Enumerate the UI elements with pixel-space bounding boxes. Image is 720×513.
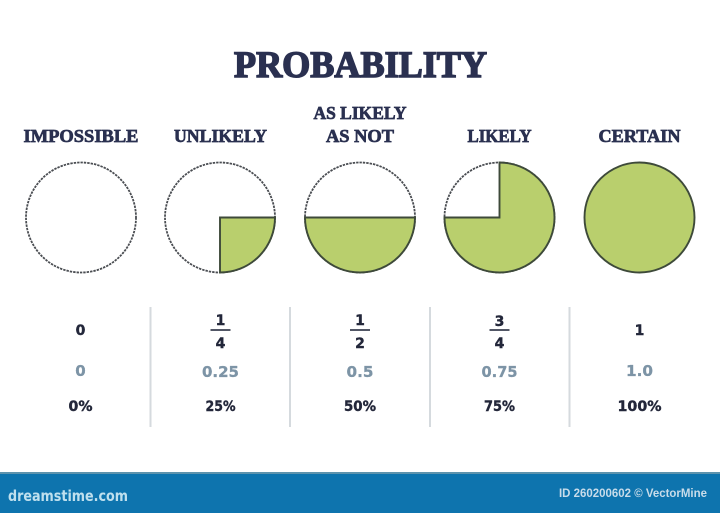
values: certain [618, 323, 662, 415]
values: unlikely: 25% [206, 399, 236, 415]
values: as likely as not: 2 [355, 336, 365, 352]
values: likely: 3 [495, 314, 504, 330]
values: impossible [68, 323, 92, 415]
values: unlikely: 1 [216, 313, 225, 329]
pie: as likely as not, half filled [305, 162, 415, 272]
values: unlikely: 4 [216, 336, 226, 352]
pie: unlikely, one quarter filled [165, 162, 275, 272]
values: as likely as not: 1 [355, 313, 365, 329]
footer band [0, 472, 720, 513]
column dividers [150, 307, 570, 427]
values: certain: 100% [618, 399, 662, 415]
column heading: unlikely: UNLIKELY [174, 126, 267, 146]
values: as likely as not [344, 313, 376, 415]
column heading: impossible: IMPOSSIBLE [24, 126, 138, 146]
values: impossible: 0 [76, 323, 86, 339]
pie: likely, three quarters filled [444, 162, 554, 272]
title: PROBABILITY [234, 45, 487, 86]
values: likely: 4 [495, 336, 505, 352]
values: likely: 0.75 [482, 363, 518, 381]
values: impossible: 0% [68, 399, 92, 415]
image credit: ID 260200602 © VectorMine [559, 488, 707, 500]
values: unlikely [202, 313, 239, 415]
values: as likely as not: 50% [344, 399, 376, 415]
column heading: certain: CERTAIN [598, 126, 680, 146]
values: impossible: 0 [75, 362, 86, 380]
watermark logo text: dreamstime.com [8, 487, 128, 505]
values: unlikely: 0.25 [202, 363, 239, 381]
column heading: as likely as not [314, 103, 406, 146]
column heading: as likely as not: AS NOT [326, 126, 394, 146]
values: likely [482, 314, 518, 415]
column heading: likely: LIKELY [468, 126, 532, 146]
pie: certain, fully filled [584, 162, 694, 272]
column heading: as likely as not: AS LIKELY [314, 103, 406, 123]
values: as likely as not: 0.5 [346, 363, 374, 381]
values: certain: 1.0 [626, 362, 653, 380]
values: likely: 75% [484, 399, 515, 415]
values: certain: 1 [635, 323, 644, 339]
pie: impossible, empty circle [26, 162, 136, 272]
